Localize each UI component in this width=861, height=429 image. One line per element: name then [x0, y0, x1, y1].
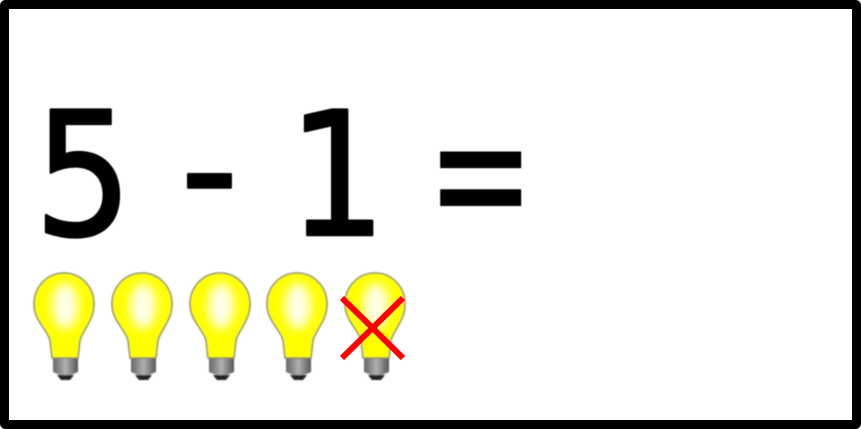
icon: bulb 2 — [112, 273, 172, 380]
equation — [34, 64, 534, 284]
icon: bulb 5 — [345, 273, 405, 380]
icon: bulb 3 — [190, 273, 250, 380]
icon: red cross over bulb 5 — [342, 298, 403, 358]
minus sign: - — [180, 68, 239, 269]
number 5: 5 — [34, 75, 132, 276]
number 1: 1 — [288, 75, 386, 276]
icon: bulb 1 — [34, 273, 94, 380]
row of five light bulbs — [34, 273, 405, 380]
icon: bulb 4 — [267, 273, 327, 380]
equals sign: = — [427, 64, 534, 284]
